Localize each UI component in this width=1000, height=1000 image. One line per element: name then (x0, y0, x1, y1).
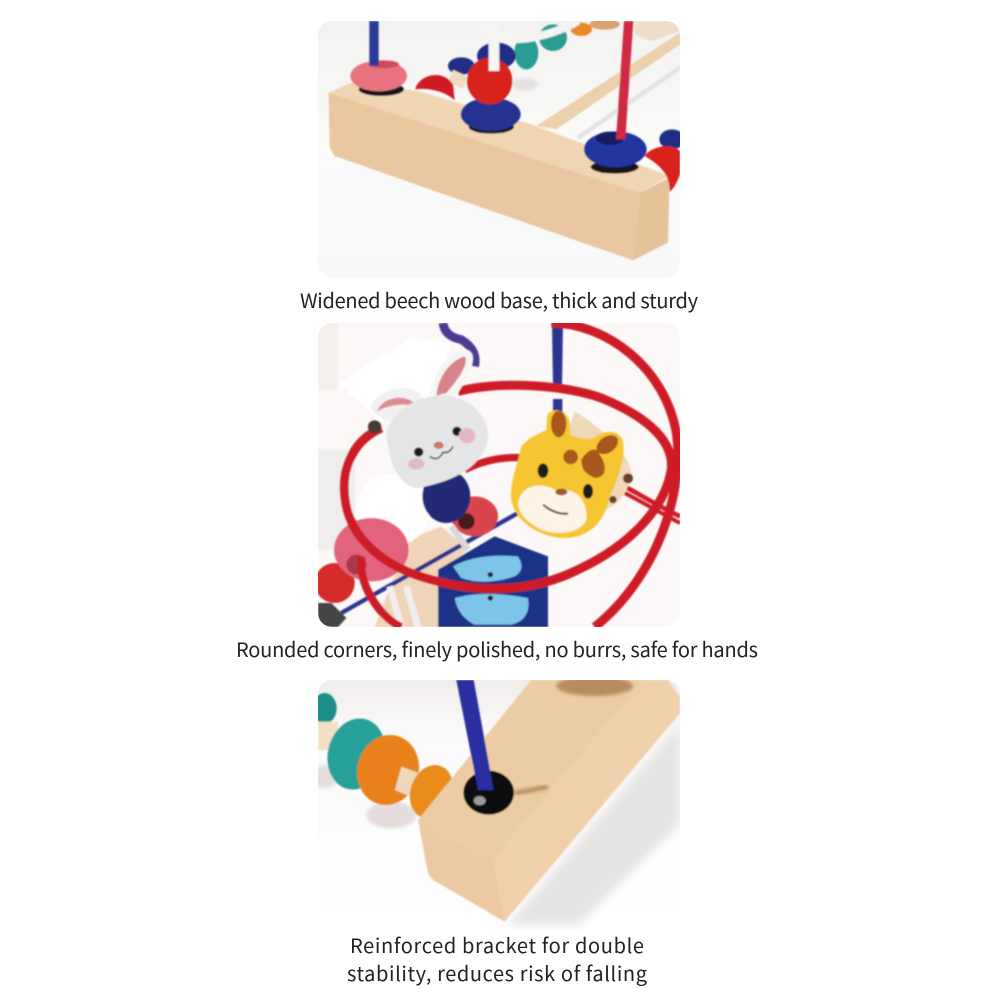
wood base (329, 83, 670, 260)
panel: reinforced bracket photo (311, 676, 680, 930)
caption 1: Widened beech wood base, thick and sturdy (300, 285, 699, 314)
black grommet and blue rod (456, 680, 548, 815)
back wooden rail (536, 21, 680, 138)
caption 3 (347, 930, 647, 987)
caption 2: Rounded corners, finely polished, no burrs, safe for hands (236, 634, 758, 663)
beads (318, 692, 452, 818)
panel: widened beech wood base photo (318, 19, 685, 278)
background blurred elements (315, 323, 563, 627)
red wire rings (344, 323, 680, 627)
panel: rounded corners photo (315, 323, 680, 627)
back beads (415, 19, 620, 100)
caption 3: Reinforced bracket for double (350, 930, 644, 959)
shadows (311, 723, 680, 925)
blue bead with red rod (584, 21, 647, 174)
right end beads (645, 129, 685, 192)
icon: giraffe (511, 410, 633, 538)
wood beam (418, 676, 680, 922)
icon: rabbit (368, 350, 488, 488)
red and blue beads on white rod (460, 42, 522, 135)
pink bead with blue rod (350, 21, 407, 96)
caption 3: stability, reduces risk of falling (347, 958, 647, 987)
elephant hexagon block (438, 536, 548, 627)
